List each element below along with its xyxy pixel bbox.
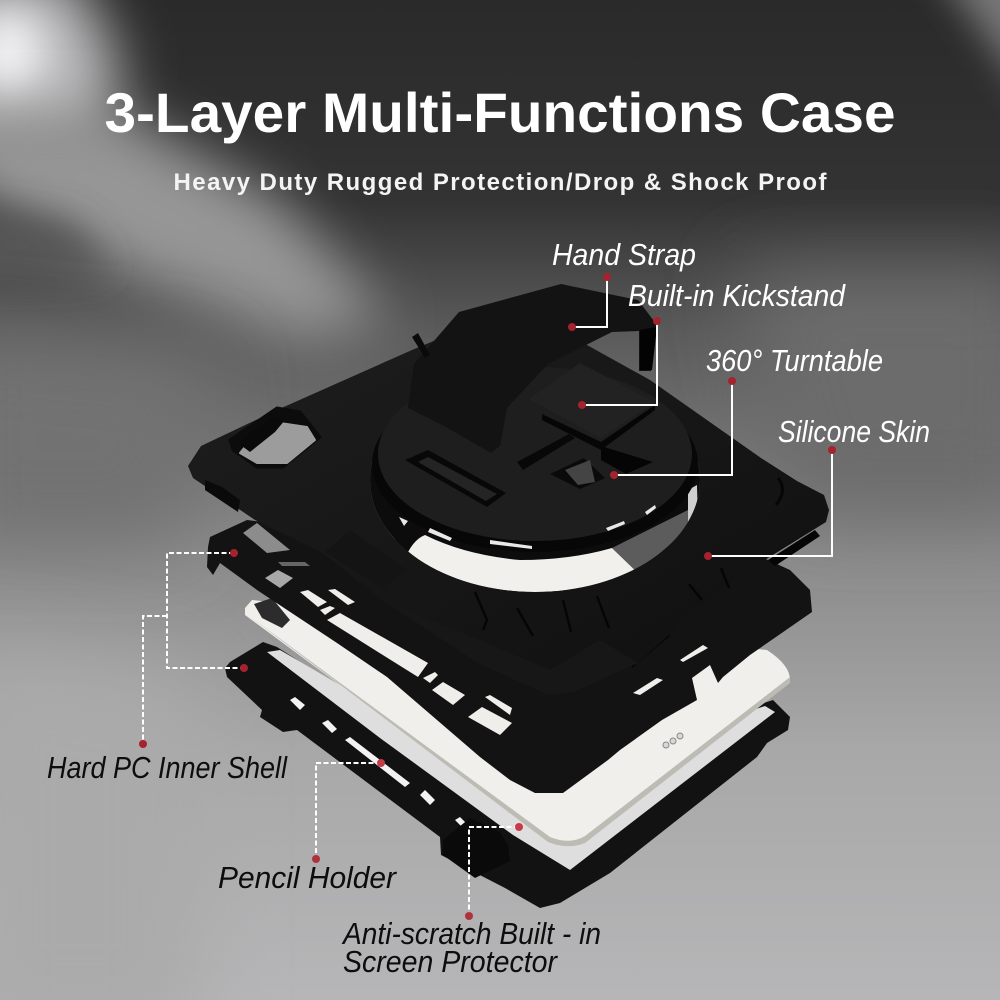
tablet <box>245 598 790 846</box>
camera module <box>254 598 290 628</box>
screen protector <box>267 650 775 870</box>
callout: anti-scratch screen protector: Anti-scratch Built - in <box>341 916 601 951</box>
title: 3-Layer Multi-Functions Case <box>104 81 896 144</box>
side button <box>205 480 240 512</box>
frame block <box>443 818 510 878</box>
callout: hard pc inner shell <box>47 549 288 785</box>
shell camera opening <box>243 523 290 553</box>
frame pencil slots <box>290 697 470 830</box>
silicone skin front layer <box>188 284 829 695</box>
inner hard shell <box>207 520 812 793</box>
turntable disc <box>372 376 698 552</box>
callout: silicone skin <box>704 414 930 560</box>
callout: anti-scratch screen protector: Screen Protector <box>343 944 559 979</box>
callout: 360 turntable: 360° Turntable <box>706 343 883 378</box>
grooves <box>475 568 729 636</box>
callout: hard pc inner shell: Hard PC Inner Shell <box>47 750 288 785</box>
shell corner slot <box>627 624 670 668</box>
shell cut-outs <box>300 589 708 735</box>
bottom layer: back plate with screen protector <box>225 642 790 908</box>
callout: anti-scratch screen protector <box>341 823 601 979</box>
disc slot <box>405 450 506 507</box>
strap clip <box>412 333 430 358</box>
corner flap <box>325 530 407 588</box>
ring highlights <box>399 505 656 549</box>
callout: built-in kickstand: Built-in Kickstand <box>628 278 847 313</box>
hand strap <box>408 284 657 453</box>
subtitle: Heavy Duty Rugged Protection/Drop & Shock Proof <box>174 169 828 196</box>
callout: hand strap: Hand Strap <box>552 237 696 272</box>
callout: pencil holder <box>218 759 398 895</box>
camera cut-out <box>230 408 320 467</box>
tablet dots <box>663 733 683 748</box>
callout: 360 turntable <box>610 343 883 479</box>
callout: silicone skin: Silicone Skin <box>778 414 930 449</box>
turntable latch <box>550 458 605 489</box>
callout: pencil holder: Pencil Holder <box>218 860 398 895</box>
view through turntable hole <box>370 462 700 592</box>
callout: built-in kickstand <box>578 278 847 409</box>
callout: hand strap <box>552 237 696 331</box>
kickstand <box>529 363 655 438</box>
